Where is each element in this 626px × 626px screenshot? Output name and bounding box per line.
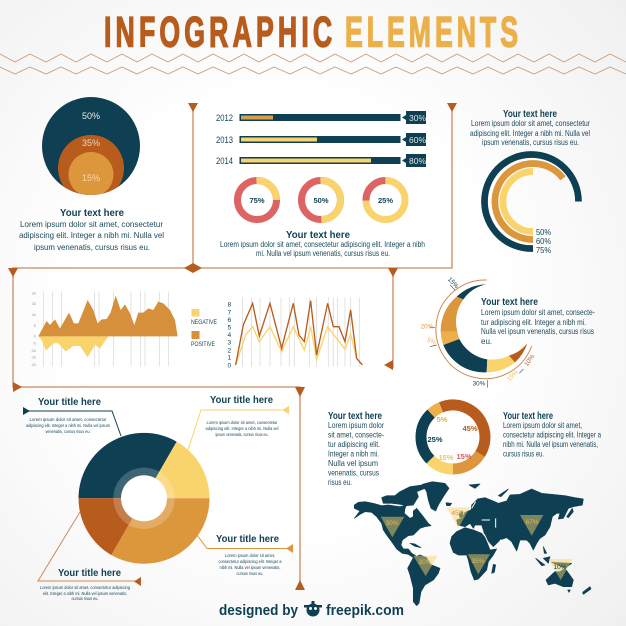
callout: top left: adipiscing elit. Integer a nibh mi. Nulla vel ipsum: [26, 423, 110, 428]
big donut pie chart: [78, 433, 210, 564]
text block: left of ring: risus eu.: [328, 477, 352, 487]
legend: [191, 309, 218, 348]
area chart: -20: [31, 363, 36, 367]
bar chart: years: 2014: [216, 156, 233, 166]
footer credit: designed by: [219, 603, 298, 619]
callout: top right: Lorem ipsum dolor sit amet, consectetur: [206, 420, 278, 425]
text block: crescent: eu.: [481, 337, 492, 346]
donut: 75%: [238, 180, 276, 220]
callout: bottom right: [197, 533, 293, 576]
text block: radial bars: adipiscing elit. Integer a nibh mi. Nulla vel: [470, 129, 590, 138]
text block: left of ring: Nulla vel ipsum: [328, 458, 378, 468]
text block: crescent: Lorem ipsum dolor sit amet, consecte-: [481, 308, 595, 317]
icon: freepik logo: [304, 601, 322, 616]
callout: top left: Lorem ipsum dolor sit amet, consectetur: [30, 417, 107, 422]
callout: bottom left: [38, 512, 141, 601]
percentage labels: 10%: [553, 564, 567, 571]
area chart: 0: [34, 335, 36, 339]
percentage labels: 30%: [418, 559, 432, 566]
text block: right of ring: nibh mi. Nulla vel ipsum venenatis,: [503, 440, 598, 449]
text block: donuts: mi. Nulla vel ipsum venenatis, cursus risus eu.: [256, 249, 390, 258]
line chart: 7: [227, 309, 231, 316]
footer credit: [219, 601, 404, 619]
title: [104, 8, 518, 56]
radial bar chart: 50%: [536, 227, 551, 237]
radial bar chart: [484, 155, 578, 255]
callout: bottom right: nibh mi. Nulla vel ipsum venenatis,: [220, 565, 280, 570]
crescent pie chart: 20%: [421, 324, 434, 331]
area chart: 20: [32, 291, 36, 295]
callout: bottom right: cursus risus eu.: [236, 571, 264, 576]
line chart: 5: [227, 324, 231, 331]
crescent pie chart: 15%: [446, 276, 460, 290]
callout: top left: [23, 396, 121, 436]
percentage labels: 45%: [451, 510, 465, 517]
legend: POSITIVE: [191, 341, 216, 348]
text block: radial bars: ipsum venenatis, cursus risus eu.: [482, 138, 579, 147]
nested circle chart: 50%: [82, 111, 100, 121]
line chart: 0: [227, 362, 231, 369]
eurasia, africa and oceania: [450, 484, 591, 594]
radial bar chart: 75%: [536, 245, 551, 255]
nested circle chart: 15%: [82, 173, 100, 183]
radial bar chart: 60%: [536, 236, 551, 246]
ring chart: 15%: [438, 453, 454, 462]
percentage labels: [385, 510, 567, 571]
ring chart: 45%: [462, 424, 478, 433]
text block: donuts: [220, 229, 425, 258]
callout: bottom right: consectetur adipiscing elit. Integer a: [218, 559, 282, 564]
ring chart: [408, 392, 498, 482]
nested circle chart: [42, 97, 140, 201]
line chart: 2: [227, 347, 231, 354]
donut: 25%: [366, 180, 405, 220]
text block: right of ring: Your text here: [503, 410, 553, 422]
text block: crescent: Your text here: [481, 296, 538, 308]
ring chart: 5%: [437, 415, 448, 424]
callout: bottom left: Lorem ipsum dolor sit amet, consectetur adipiscing: [40, 585, 130, 590]
area chart: -10: [31, 349, 36, 353]
americas and greenland: [354, 482, 452, 606]
text block: radial bars: Your text here: [503, 108, 557, 120]
title: ELEMENTS: [345, 8, 518, 56]
text block: crescent: [481, 296, 595, 346]
area chart: -15: [31, 356, 36, 360]
text block: circle chart: [19, 207, 164, 252]
line chart: 1: [227, 355, 231, 362]
bar chart: years: [216, 111, 426, 167]
ring chart: 25%: [427, 435, 443, 444]
text block: left of ring: Integer a nibh mi.: [328, 448, 379, 458]
percentage labels: 67%: [525, 519, 539, 526]
bar chart: years: 60%: [409, 135, 426, 145]
callout: bottom left: elit. Integer a nibh mi. Nulla vel ipsum venenatis,: [43, 591, 127, 596]
text block: left of ring: tur adipiscing elit.: [328, 439, 380, 449]
text block: left of ring: venenatis, cursus: [328, 468, 379, 478]
text block: crescent: tur adipiscing elit. Integer a nibh mi.: [481, 318, 586, 327]
callout: top right: [188, 394, 289, 450]
text block: right of ring: [503, 410, 601, 458]
bar chart: years: 30%: [409, 113, 426, 123]
text block: right of ring: cursus risus eu.: [503, 450, 544, 458]
callout: bottom right: Your title here: [216, 533, 279, 545]
text block: left of ring: [328, 410, 384, 487]
ring chart: 15%: [456, 452, 472, 461]
area chart: 10: [32, 313, 36, 317]
percentage labels: 30%: [385, 520, 399, 527]
line chart: 8: [227, 302, 231, 309]
title: INFOGRAPHIC: [104, 8, 332, 56]
donut: 25%: 25%: [378, 196, 393, 205]
callout: top left: Your title here: [38, 396, 101, 408]
percentage triangles: [381, 507, 573, 580]
callout: bottom left: cursus risus eu.: [72, 596, 98, 601]
text block: left of ring: sit amet, consecte-: [328, 430, 384, 440]
crescent pie chart: 10%: [523, 353, 536, 368]
donut: 50%: 50%: [313, 196, 329, 205]
crescent pie chart: [421, 276, 536, 388]
text block: left of ring: Lorem ipsum dolor: [328, 420, 384, 430]
bar chart: years: 2013: [216, 135, 233, 145]
area chart: 5: [34, 324, 36, 328]
text block: right of ring: Lorem ipsum dolor sit amet,: [503, 421, 582, 430]
nested circle chart: 35%: [82, 138, 100, 148]
callout: bottom left: Your title here: [58, 567, 121, 579]
callout: bottom right: Lorem ipsum dolor sit amet,: [225, 553, 275, 558]
text block: crescent: Nulla vel ipsum venenatis, cursus risus: [481, 327, 594, 336]
text block: circle chart: Your text here: [60, 207, 124, 219]
text block: radial bars: Lorem ipsum dolor sit amet, consectetur: [471, 119, 590, 128]
world map: [354, 482, 591, 606]
callout: top right: adipiscing elit. Integer a nibh mi. Nulla vel: [206, 426, 279, 431]
line chart: 6: [227, 317, 231, 324]
line chart: 4: [227, 332, 231, 339]
line chart: [227, 297, 362, 369]
area chart: -5: [33, 342, 36, 346]
text block: donuts: Lorem ipsum dolor sit amet, consectetur adipiscing elit. Integer a nibh: [220, 240, 425, 249]
percentage labels: 35%: [471, 558, 485, 565]
frame lines with arrow markers: [8, 103, 457, 590]
legend: NEGATIVE: [191, 319, 218, 326]
text block: left of ring: Your text here: [328, 410, 382, 422]
bar chart: years: 80%: [409, 156, 426, 166]
text block: circle chart: adipiscing elit. Integer a nibh mi. Nulla vel: [19, 230, 164, 240]
text block: donuts: Your text here: [286, 229, 350, 241]
donut: 50%: [302, 180, 340, 220]
text block: circle chart: ipsum venenatis, cursus risus eu.: [34, 242, 150, 252]
bar chart: years: 2012: [216, 113, 233, 123]
donut: 75%: 75%: [249, 196, 265, 205]
footer credit: freepik.com: [326, 603, 404, 619]
crescent pie chart: 15%: [506, 369, 520, 383]
callout: top left: venenatis, cursus risus eu.: [46, 429, 90, 434]
area chart: [31, 291, 178, 367]
callout: top right: ipsum venenatis, cursus risus eu.: [216, 432, 268, 437]
crescent pie chart: 5%: [426, 336, 437, 347]
area chart: 15: [32, 302, 36, 306]
text block: radial bars: [470, 108, 590, 147]
line chart: 3: [227, 340, 231, 347]
text block: circle chart: Lorem ipsum dolor sit amet, consectetur: [20, 219, 163, 229]
callout: top right: Your title here: [210, 394, 273, 406]
crescent pie chart: 30%: [473, 381, 486, 388]
